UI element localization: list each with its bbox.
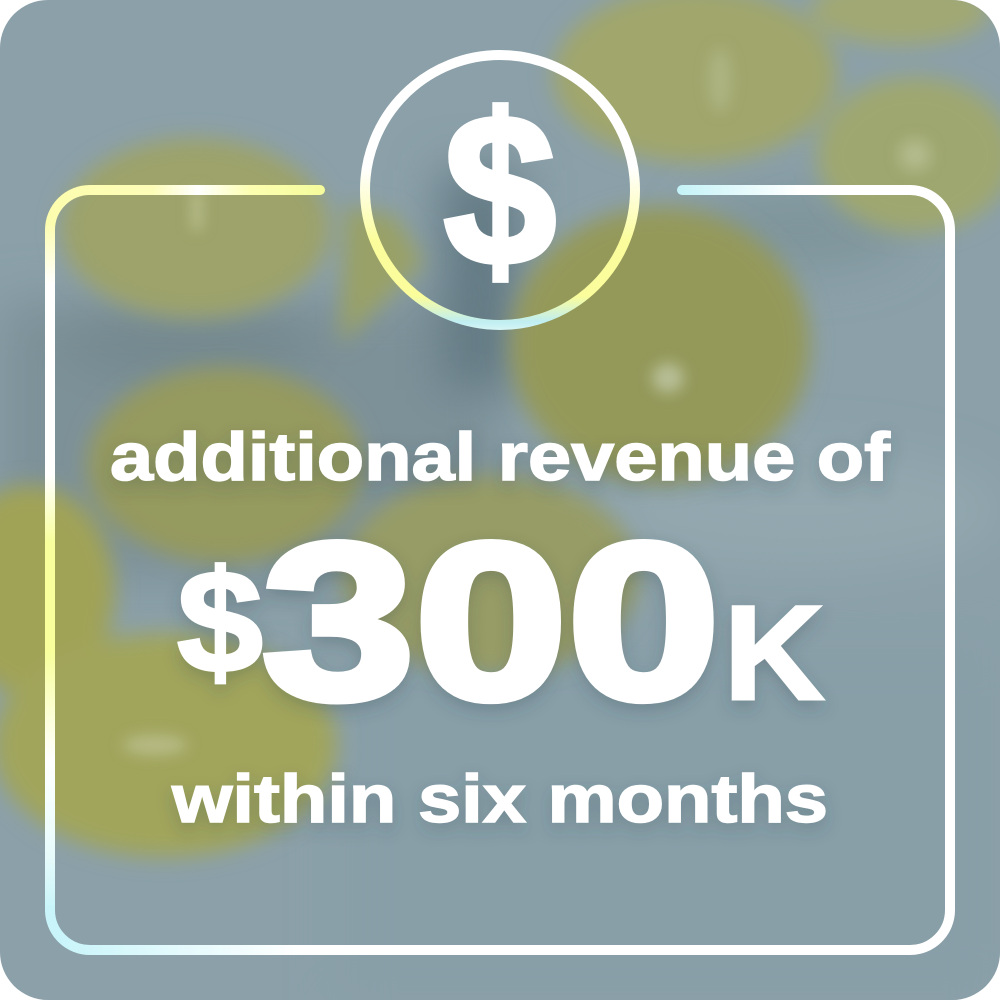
big number: $300K [177, 498, 824, 746]
frame outline [50, 190, 950, 950]
big number: $300K: 300 [262, 498, 720, 746]
subheading: within six months: within six months [171, 761, 828, 837]
icon: dollar sign in ring: $ [444, 71, 556, 310]
text block: revenue headline [110, 419, 890, 837]
big number: $300K: $ [177, 540, 263, 703]
icon: dollar sign in ring [365, 55, 635, 325]
heading: additional revenue of: additional revenue of [110, 419, 890, 495]
big number: $300K: K [724, 579, 824, 728]
